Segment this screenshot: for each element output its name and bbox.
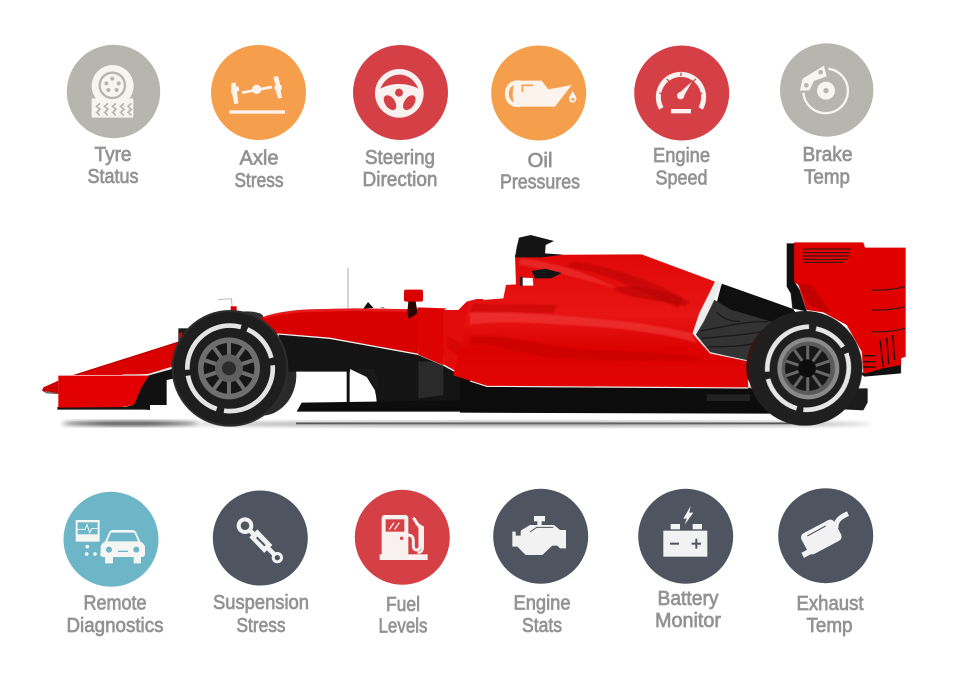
label: brake temp: Brake — [802, 144, 852, 166]
label: engine speed: Engine — [653, 145, 710, 167]
rear wing black end — [787, 243, 807, 312]
tyre stripes — [187, 326, 273, 411]
rear wheel rim — [777, 337, 839, 399]
main body — [453, 254, 748, 388]
label: engine stats — [514, 592, 570, 637]
black front wing support — [122, 367, 175, 410]
panel: axle stress — [211, 45, 306, 192]
mirror — [407, 301, 417, 319]
label: steering direction: Direction — [362, 169, 438, 191]
label: fuel levels — [378, 594, 428, 638]
label: battery monitor: Battery — [658, 588, 718, 610]
label: suspension stress — [213, 592, 309, 637]
icon: engine — [493, 489, 588, 584]
icon: brake disc — [780, 43, 873, 137]
label: oil pressures — [500, 150, 580, 194]
label: fuel levels: Fuel — [386, 594, 420, 616]
panel: engine speed — [634, 46, 729, 190]
label: remote diagnostics: Remote — [84, 592, 146, 614]
black sidepod underside — [278, 334, 480, 405]
nose cone — [73, 342, 178, 375]
panel: fuel levels — [355, 490, 450, 638]
mid body behind sidepod vane — [442, 299, 483, 388]
label: axle stress: Axle — [240, 148, 278, 170]
upper chassis — [260, 308, 418, 354]
panel: suspension stress — [213, 490, 309, 637]
white gap under airbox — [522, 278, 533, 286]
suspension strut — [347, 368, 350, 404]
front wing — [58, 376, 149, 408]
rear tyre — [748, 311, 862, 426]
panel: brake temp — [780, 43, 873, 188]
label: remote diagnostics: Diagnostics — [66, 615, 164, 637]
label: oil pressures: Oil — [528, 150, 552, 172]
rear section of car — [453, 235, 906, 426]
panel: remote diagnostics — [64, 492, 164, 637]
icon: suspension — [213, 490, 308, 586]
label: engine stats: Stats — [522, 615, 562, 637]
far-side tyre — [226, 334, 296, 416]
body reflections — [470, 258, 700, 361]
antenna and camera details — [218, 268, 385, 311]
front section of car — [42, 268, 483, 426]
front tyre — [173, 311, 287, 426]
icon: exhaust — [778, 488, 873, 583]
icon: oil can — [491, 46, 586, 140]
label: brake temp — [802, 144, 852, 188]
label: exhaust temp — [796, 593, 864, 637]
label: fuel levels: Levels — [378, 616, 428, 638]
icon: axle — [211, 45, 306, 140]
label: steering direction — [362, 147, 438, 191]
label: steering direction: Steering — [365, 147, 435, 169]
panel: exhaust temp — [778, 488, 873, 637]
label: engine speed — [653, 145, 710, 190]
label: remote diagnostics — [66, 592, 164, 637]
panel: battery monitor — [638, 489, 733, 632]
label: battery monitor: Monitor — [655, 610, 721, 632]
label: brake temp: Temp — [804, 166, 850, 188]
ground shadow — [62, 422, 870, 426]
label: axle stress: Stress — [234, 170, 284, 192]
rear wing — [794, 242, 906, 373]
floor — [460, 372, 783, 414]
panel: engine stats — [493, 489, 588, 637]
panel: steering direction — [353, 45, 448, 191]
white floor line — [470, 381, 748, 388]
icon: fuel pump — [355, 490, 450, 585]
gearbox ribs — [694, 300, 774, 362]
label: battery monitor — [655, 588, 721, 632]
wing louvres — [803, 249, 905, 332]
nose white trim — [123, 367, 172, 376]
label: oil pressures: Pressures — [500, 172, 580, 194]
label: engine speed: Speed — [656, 168, 708, 190]
panel: tyre status — [67, 45, 160, 188]
label: engine stats: Engine — [514, 592, 570, 614]
label: suspension stress: Stress — [236, 615, 286, 637]
icon: battery — [638, 489, 733, 584]
rear tyre stripes — [767, 327, 849, 410]
white stripe — [693, 282, 723, 335]
rear gearbox lower — [843, 388, 868, 410]
icon: speedometer — [634, 46, 729, 140]
icon: tyre — [67, 45, 160, 138]
label: axle stress — [234, 148, 284, 192]
front wing nose tip — [42, 381, 58, 394]
airbox inlet slot — [532, 269, 562, 278]
label: tyre status: Status — [88, 166, 138, 188]
icon: car and monitor — [64, 492, 158, 587]
icon: steering wheel — [353, 45, 448, 140]
panel: oil pressures — [491, 46, 586, 194]
label: exhaust temp: Exhaust — [796, 593, 864, 615]
sidepod vane — [417, 307, 447, 365]
label: tyre status: Tyre — [94, 144, 132, 166]
diffuser fins — [863, 335, 895, 367]
front wing end plate shadow — [57, 407, 150, 410]
white body line — [278, 334, 480, 385]
diffuser black — [860, 358, 901, 377]
front wheel rim — [198, 337, 260, 399]
floor plank — [297, 400, 480, 412]
engine cover black — [713, 284, 803, 332]
airbox top black — [515, 235, 563, 257]
label: exhaust temp: Temp — [806, 615, 852, 637]
label: suspension stress: Suspension — [213, 592, 309, 614]
label: tyre status — [88, 144, 138, 188]
racing car illustration — [42, 235, 906, 426]
